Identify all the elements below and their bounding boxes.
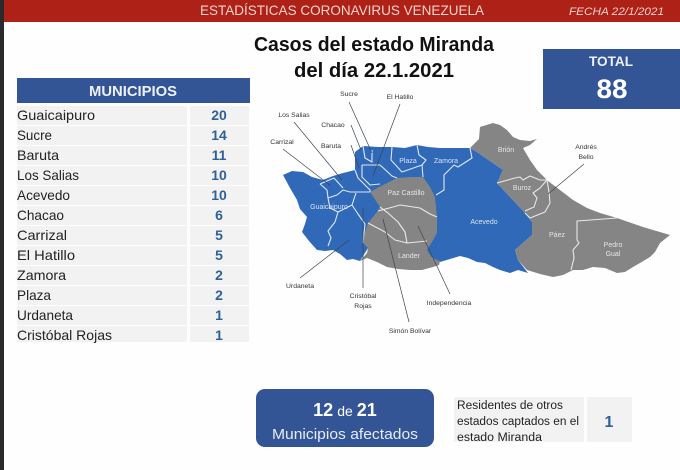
map: callout labels outside xyxy=(270,91,597,335)
row: Carrizal xyxy=(17,226,249,245)
total box: TOTAL xyxy=(589,53,633,69)
map: municipal borders xyxy=(320,145,472,246)
row: Baruta: 11 xyxy=(212,147,227,163)
row: El Hatillo: El Hatillo xyxy=(17,247,75,263)
row: Urdaneta: 1 xyxy=(215,307,223,323)
row: Zamora: Zamora xyxy=(17,267,66,283)
affected municipalities box: Municipios afectados xyxy=(272,426,418,443)
map: region labels inside: Lander xyxy=(398,253,421,260)
row: Urdaneta xyxy=(17,306,249,325)
row: Cristóbal Rojas xyxy=(17,326,249,343)
map: region labels inside xyxy=(310,147,622,260)
row: Plaza: 2 xyxy=(215,287,223,303)
map: callout labels outside: Cristóbal xyxy=(350,293,377,300)
row: Urdaneta: Urdaneta xyxy=(17,307,73,323)
row: Los Salias xyxy=(17,166,249,185)
map: callout labels outside: Baruta xyxy=(321,143,341,150)
row: Sucre: Sucre xyxy=(17,127,52,143)
map: region labels inside: Pedro xyxy=(604,242,622,249)
municipalities table xyxy=(17,78,250,343)
row: Sucre xyxy=(17,126,249,145)
map: callout labels outside: Andrés xyxy=(575,144,597,151)
residents from other states: estados captados en el xyxy=(457,416,579,428)
map: callout labels outside: Bello xyxy=(578,154,594,161)
map: region labels inside: Paz Castillo xyxy=(388,190,425,197)
row: Zamora: 2 xyxy=(215,267,223,283)
row: Los Salias: 10 xyxy=(211,167,227,183)
row: El Hatillo: 5 xyxy=(215,247,223,263)
map: callout labels outside: Sucre xyxy=(340,91,358,98)
row: Cristóbal Rojas: 1 xyxy=(215,327,223,343)
map: callout labels outside: Los Salias xyxy=(278,112,310,119)
row: Chacao: Chacao xyxy=(17,207,64,223)
row: Acevedo: 10 xyxy=(211,187,227,203)
header bar: FECHA 22/1/2021 xyxy=(569,6,664,18)
row: Plaza: Plaza xyxy=(17,287,51,303)
row: Plaza xyxy=(17,286,249,305)
residents from other states xyxy=(454,397,632,444)
map of Miranda xyxy=(270,91,670,335)
row: El Hatillo xyxy=(17,246,249,265)
map: region labels inside: Zamora xyxy=(434,158,458,165)
title: Casos del estado Miranda xyxy=(254,34,495,56)
table heading xyxy=(17,78,250,103)
header bar xyxy=(4,0,680,22)
row: Zamora xyxy=(17,266,249,285)
row: Chacao: 6 xyxy=(215,207,223,223)
map: unaffected municipalities east (grey) xyxy=(470,123,670,277)
map: region labels inside: Brión xyxy=(498,147,514,154)
map: region labels inside: Buroz xyxy=(513,185,532,192)
row: Cristóbal Rojas: Cristóbal Rojas xyxy=(17,327,112,343)
map: callout labels outside: El Hatillo xyxy=(387,94,414,101)
row: Baruta: Baruta xyxy=(17,147,59,163)
map: region labels inside: Guaicaipuro xyxy=(310,204,348,211)
map: leader lines xyxy=(283,102,584,322)
map: affected municipalities (blue) xyxy=(283,145,532,273)
map: callout labels outside: Simón Bolívar xyxy=(389,328,432,335)
row: Acevedo xyxy=(17,186,249,205)
total box xyxy=(543,49,680,109)
map: region labels inside: Acevedo xyxy=(470,219,498,226)
row: Baruta xyxy=(17,146,249,165)
row: Guaicaipuro: 20 xyxy=(211,107,227,123)
total box: 88 xyxy=(596,74,628,104)
row: Carrizal: Carrizal xyxy=(17,227,67,243)
row: Sucre: 14 xyxy=(211,127,227,143)
title xyxy=(254,34,495,82)
map: callout labels outside: Carrizal xyxy=(270,139,294,146)
residents from other states: Residentes de otros xyxy=(457,400,563,412)
affected municipalities box: 12 de21 xyxy=(313,400,377,420)
title: del día 22.1.2021 xyxy=(294,60,454,82)
row: Guaicaipuro: Guaicaipuro xyxy=(17,107,95,123)
map: callout labels outside: Independencia xyxy=(427,300,472,307)
residents from other states: estado Miranda xyxy=(457,432,543,444)
header bar: ESTADÍSTICAS CORONAVIRUS VENEZUELA xyxy=(200,2,485,18)
map: callout labels outside: Rojas xyxy=(354,303,372,310)
residents from other states: 1 xyxy=(605,414,614,431)
row: Carrizal: 5 xyxy=(215,227,223,243)
map: region labels inside: Plaza xyxy=(399,158,417,165)
row: Los Salias: Los Salias xyxy=(17,167,79,183)
map: region labels inside: Gual xyxy=(606,251,621,258)
row: Acevedo: Acevedo xyxy=(17,187,70,203)
row: Chacao xyxy=(17,206,249,225)
map: callout labels outside: Urdaneta xyxy=(286,283,314,290)
affected municipalities box xyxy=(256,389,434,447)
table heading: MUNICIPIOS xyxy=(89,83,177,100)
row: Guaicaipuro xyxy=(17,106,249,125)
map: unaffected municipalities centre (grey) xyxy=(360,177,440,270)
map: callout labels outside: Chacao xyxy=(321,122,345,129)
map: region labels inside: Páez xyxy=(549,232,565,239)
